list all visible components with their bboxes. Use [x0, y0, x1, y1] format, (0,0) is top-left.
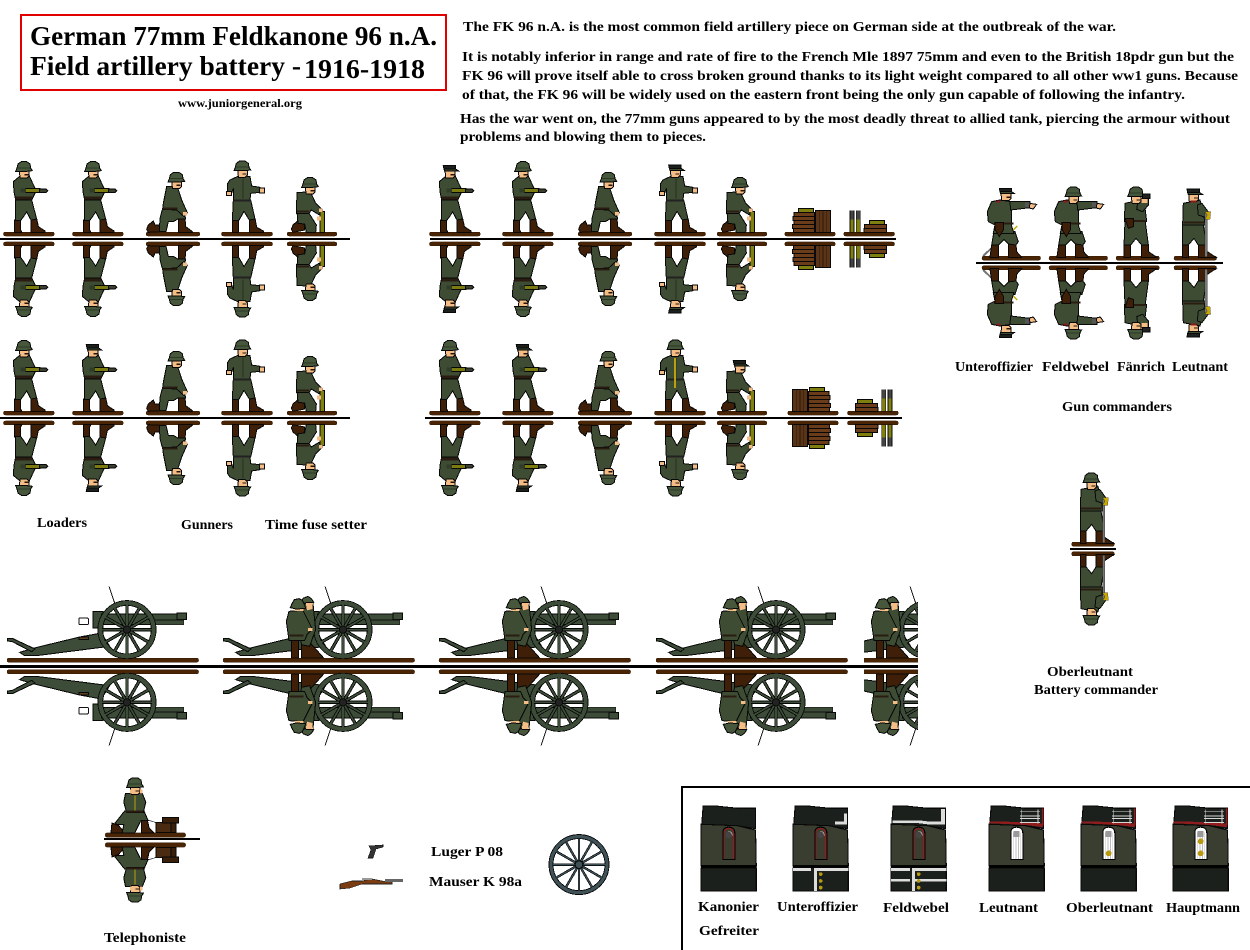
title box: 1916-1918	[304, 54, 425, 84]
insignia labels: Leutnant	[979, 900, 1039, 915]
crew row 2 left	[0, 340, 350, 496]
icon: pistol	[368, 845, 383, 858]
insignia labels: Feldwebel	[883, 900, 949, 915]
intro text block: Has the war went on, the 77mm guns appeared to by the most deadly threat to allied tank, piercing the armour without	[460, 111, 1231, 126]
crew role labels: Gunners	[181, 517, 233, 532]
insignia labels: Hauptmann	[1166, 900, 1241, 915]
crew row 2 right with ammunition	[425, 340, 902, 496]
telephone operator figure	[104, 778, 200, 902]
insignia: Leutnant	[989, 806, 1044, 891]
intro text block: It is notably inferior in range and rate of fire to the French Mle 1897 75mm and even to the British 18pdr gun but the	[462, 49, 1234, 64]
crew row 1 left	[0, 161, 350, 317]
gun commanders labels: Leutnant	[1172, 359, 1229, 374]
gun commanders labels: Fänrich	[1117, 359, 1166, 374]
gun commanders labels: Feldwebel	[1042, 359, 1109, 374]
insignia: Oberleutnant	[1081, 806, 1136, 891]
insignia labels	[698, 899, 1241, 938]
icon: rifle	[340, 878, 403, 889]
gun with crew 1	[223, 586, 415, 746]
insignia: Unteroffizier	[793, 806, 848, 891]
intro text block: of that, the FK 96 will be widely used on the eastern front being the only gun capable of following the infantry.	[462, 87, 1185, 102]
battery commander figure	[1070, 473, 1116, 625]
title box	[21, 15, 446, 90]
battery commander label: Oberleutnant	[1047, 664, 1134, 679]
telephone operator label: Telephoniste	[104, 930, 186, 945]
gun commanders labels	[955, 359, 1229, 414]
icon: spoked wheel	[551, 837, 607, 893]
gun commanders labels: Unteroffizier	[955, 359, 1033, 374]
intro text block	[460, 19, 1238, 144]
insignia labels: Gefreiter	[699, 923, 759, 938]
panel: rank insignia	[682, 787, 1250, 950]
gun with crew 2	[439, 586, 631, 746]
battery commander label: Battery commander	[1034, 682, 1158, 697]
intro text block: FK 96 will prove itself able to cross broken ground thanks to its light weight compared to all other ww1 guns. Because	[462, 68, 1238, 83]
insignia: Feldwebel	[891, 806, 946, 891]
pistol label: Luger P 08	[431, 844, 503, 859]
title box: Field artillery battery -	[30, 51, 301, 81]
website credit: www.juniorgeneral.org	[178, 98, 302, 110]
gun commanders figures	[976, 187, 1223, 339]
gun commanders labels: Gun commanders	[1062, 399, 1172, 414]
insignia labels: Kanonier	[698, 899, 759, 914]
intro text block: problems and blowing them to pieces.	[460, 129, 706, 144]
gun with crew 3	[656, 586, 848, 746]
intro text block: The FK 96 n.A. is the most common field artillery piece on German side at the outbreak of the war.	[463, 19, 1116, 34]
insignia labels: Unteroffizier	[777, 899, 858, 914]
crew role labels: Loaders	[37, 515, 87, 530]
insignia: Kanonier	[701, 806, 756, 891]
crew role labels: Time fuse setter	[265, 517, 367, 532]
insignia: Hauptmann	[1173, 806, 1228, 891]
insignia labels: Oberleutnant	[1066, 900, 1154, 915]
crew row 1 right with ammunition	[429, 162, 896, 316]
title box: German 77mm Feldkanone 96 n.A.	[30, 21, 437, 51]
rifle label: Mauser K 98a	[429, 874, 522, 889]
field guns row	[0, 586, 1000, 746]
crew role labels	[37, 515, 367, 532]
battery commander label	[1034, 664, 1158, 697]
clipped gun with crew	[864, 586, 918, 746]
gun without crew	[7, 586, 199, 746]
